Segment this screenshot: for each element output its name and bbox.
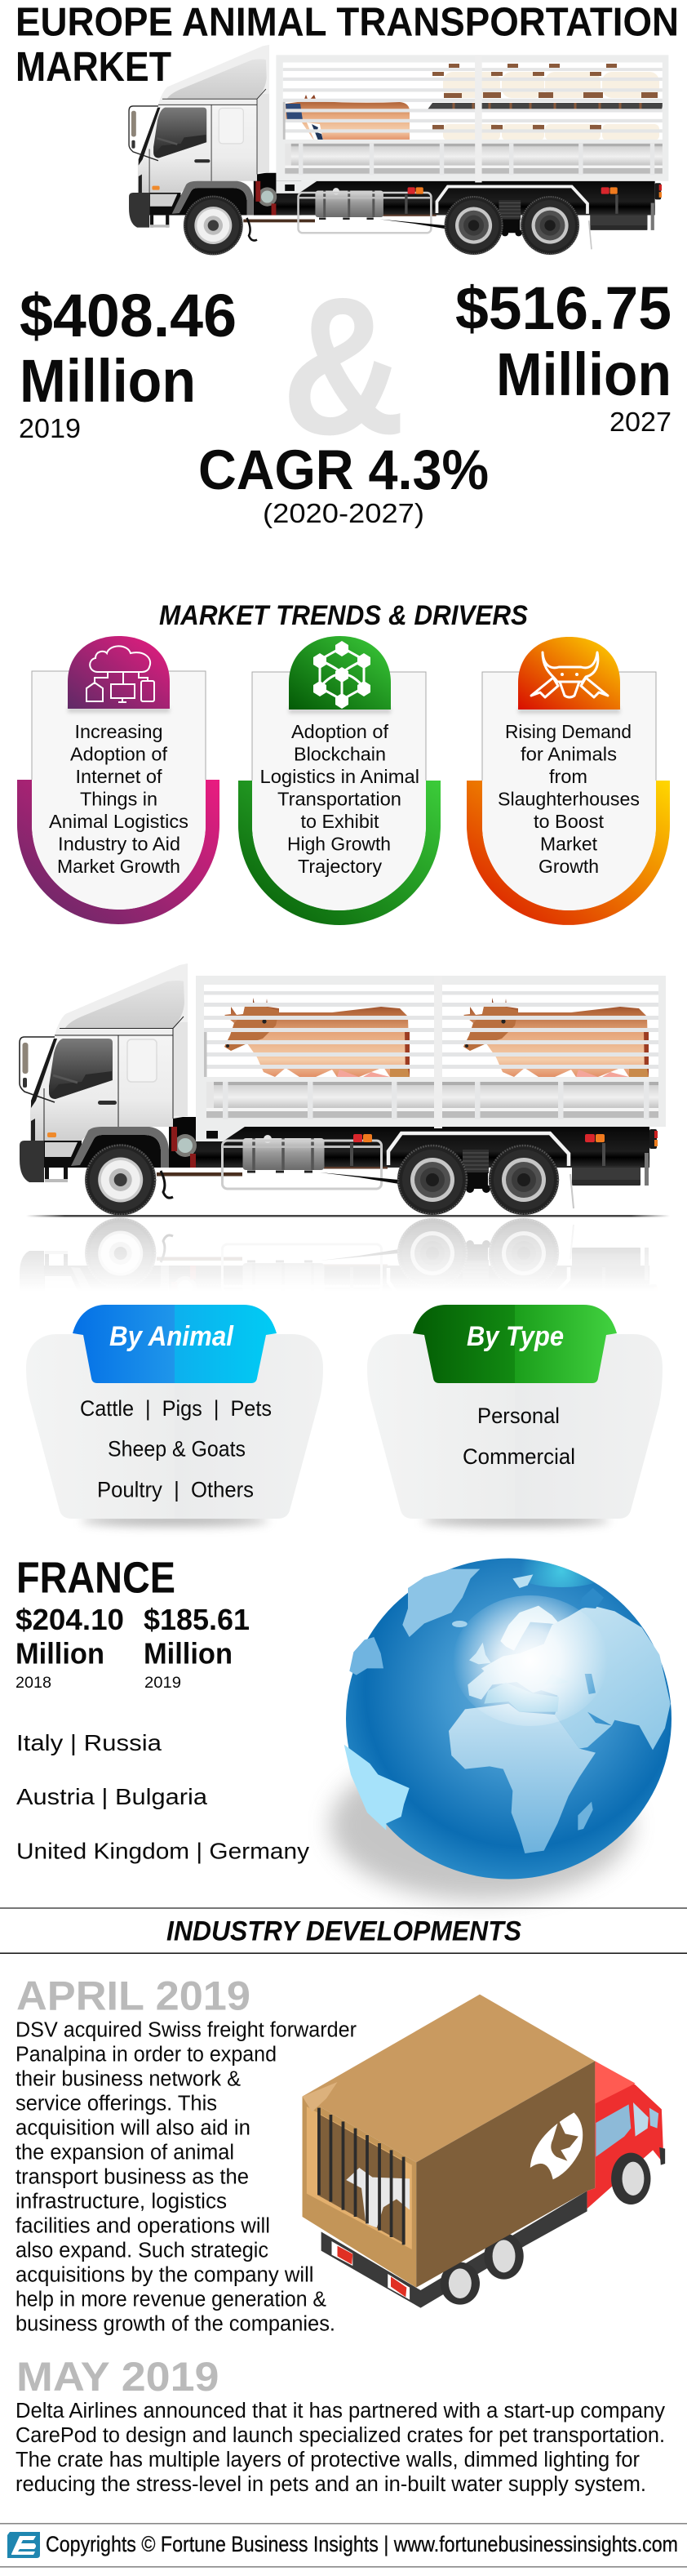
card text: Adoption of bbox=[70, 744, 168, 765]
heading: market trends and drivers: MARKET TRENDS & DRIVERS bbox=[159, 600, 528, 631]
France market stats: $185.61 bbox=[144, 1603, 250, 1636]
cow left bbox=[224, 998, 410, 1077]
title: MARKET bbox=[16, 43, 171, 90]
market value 2027 bbox=[455, 274, 671, 437]
list of European countries bbox=[16, 1730, 309, 1863]
divider below heading bbox=[0, 1953, 687, 1954]
segment list bbox=[80, 1396, 272, 1502]
market value 2027: Million bbox=[496, 340, 671, 408]
segment list: Sheep & Goats bbox=[108, 1437, 246, 1462]
France market stats: $204.10 bbox=[16, 1603, 124, 1636]
April body text: acquisitions by the company will bbox=[16, 2263, 313, 2286]
card text: Adoption of bbox=[291, 721, 389, 742]
April body text: infrastructure, logistics bbox=[16, 2190, 227, 2213]
title bbox=[16, 0, 679, 90]
panel: by type bbox=[367, 1305, 663, 1526]
cow right bbox=[463, 998, 649, 1077]
market value 2027: 2027 bbox=[609, 407, 671, 437]
tab heading: By Type bbox=[467, 1321, 564, 1352]
market value 2019: Million bbox=[20, 347, 196, 415]
market value 2019: 2019 bbox=[19, 413, 81, 443]
icon: Fortune Business Insights logo bbox=[7, 2532, 40, 2558]
card text: Transportation bbox=[277, 789, 401, 810]
card text: for Animals bbox=[521, 744, 617, 765]
France market stats: 2018 bbox=[16, 1675, 51, 1692]
France market stats: Million bbox=[144, 1636, 233, 1671]
April body text: transport business as the bbox=[16, 2165, 249, 2188]
segment list: Poultry | Others bbox=[97, 1478, 254, 1502]
list of European countries: Austria | Bulgaria bbox=[16, 1784, 207, 1809]
April body text: business growth of the companies. bbox=[16, 2312, 335, 2335]
van logo: dog badge bbox=[530, 2112, 583, 2179]
April body text: facilities and operations will bbox=[16, 2214, 270, 2237]
CAGR: CAGR 4.3% bbox=[198, 438, 489, 501]
icon: cloud connected devices bbox=[68, 636, 170, 709]
illustration: isometric animal van bbox=[303, 1995, 665, 2308]
April body text: their business network & bbox=[16, 2067, 241, 2090]
tab heading bbox=[73, 1305, 277, 1383]
card text bbox=[259, 721, 419, 877]
card text: Market bbox=[540, 834, 598, 855]
card text: Market Growth bbox=[57, 856, 180, 877]
card text: Slaughterhouses bbox=[498, 789, 640, 810]
footer bbox=[0, 2523, 687, 2568]
heading: industry developments: INDUSTRY DEVELOPMENTS bbox=[166, 1915, 521, 1946]
card text: Logistics in Animal bbox=[259, 766, 419, 787]
card text: Industry to Aid bbox=[58, 834, 180, 855]
divider above developments bbox=[0, 1907, 687, 1909]
tab heading: By Animal bbox=[109, 1321, 234, 1352]
France market stats: 2019 bbox=[144, 1675, 181, 1692]
panel: by animal bbox=[26, 1305, 323, 1526]
France market stats: Million bbox=[16, 1636, 104, 1671]
tab heading bbox=[413, 1305, 617, 1383]
April body text bbox=[16, 2018, 357, 2335]
market value 2019: $408.46 bbox=[20, 282, 237, 349]
card text: Blockchain bbox=[294, 744, 386, 765]
panel: slaughterhouse driver card bbox=[467, 637, 670, 925]
card text: to Boost bbox=[534, 811, 605, 832]
May body text: The crate has multiple layers of protective walls, dimmed lighting for bbox=[16, 2449, 640, 2471]
card text bbox=[49, 721, 188, 877]
development: May 2019: MAY 2019 bbox=[16, 2354, 219, 2400]
development: April 2019 bbox=[16, 1973, 357, 2335]
May body text: Delta Airlines announced that it has partnered with a start-up company bbox=[16, 2400, 665, 2423]
card text: Rising Demand bbox=[505, 721, 632, 742]
icon: blockchain network bbox=[289, 636, 391, 710]
panel: IoT driver card bbox=[17, 636, 219, 924]
April body text: also expand. Such strategic bbox=[16, 2239, 268, 2262]
card text bbox=[498, 721, 640, 877]
illustration: white truck carrying cow and sheep bbox=[129, 45, 668, 255]
icon: bull head bbox=[518, 637, 620, 710]
April body text: help in more revenue generation & bbox=[16, 2288, 326, 2311]
April body text: Panalpina in order to expand bbox=[16, 2043, 277, 2066]
France market stats bbox=[16, 1553, 250, 1692]
CAGR: (2020-2027) bbox=[263, 498, 424, 528]
May body text: CarePod to design and launch specialized crates for pet transportation. bbox=[16, 2424, 665, 2447]
card text: to Exhibit bbox=[300, 811, 379, 832]
card text: Animal Logistics bbox=[49, 811, 188, 832]
May body text: reducing the stress-level in pets and an in-built water supply system. bbox=[16, 2473, 646, 2496]
panel: blockchain driver card bbox=[238, 636, 441, 925]
April body text: service offerings. This bbox=[16, 2092, 217, 2115]
market value 2027: $516.75 bbox=[455, 274, 671, 342]
development: May 2019 bbox=[16, 2354, 665, 2496]
card text: Growth bbox=[539, 856, 599, 877]
card text: Internet of bbox=[75, 766, 162, 787]
cow in cargo bay bbox=[286, 95, 410, 140]
card text: Increasing bbox=[75, 721, 163, 742]
market value 2019 bbox=[19, 282, 237, 443]
segment list: Commercial bbox=[463, 1444, 575, 1469]
icon: globe bbox=[330, 1555, 671, 1900]
April body text: DSV acquired Swiss freight forwarder bbox=[16, 2018, 357, 2041]
card text: High Growth bbox=[287, 834, 391, 855]
segment list bbox=[463, 1404, 575, 1469]
segment list: Personal bbox=[477, 1404, 560, 1428]
sheep in cargo bay bbox=[428, 64, 663, 140]
development: April 2019: APRIL 2019 bbox=[16, 1973, 250, 2018]
CAGR bbox=[198, 438, 489, 528]
April body text: the expansion of animal bbox=[16, 2141, 234, 2164]
card text: Trajectory bbox=[298, 856, 383, 877]
card text: Things in bbox=[80, 789, 157, 810]
illustration: large truck carrying cattle bbox=[20, 963, 670, 1217]
segment list: Cattle | Pigs | Pets bbox=[80, 1396, 272, 1421]
card text: from bbox=[549, 766, 587, 787]
April body text: acquisition will also aid in bbox=[16, 2116, 250, 2139]
list of European countries: Italy | Russia bbox=[16, 1730, 162, 1755]
ampersand watermark: & bbox=[281, 256, 406, 475]
France market stats: FRANCE bbox=[16, 1553, 175, 1602]
May body text bbox=[16, 2400, 665, 2496]
truck reflection bbox=[20, 1217, 649, 1281]
list of European countries: United Kingdom | Germany bbox=[16, 1839, 309, 1863]
